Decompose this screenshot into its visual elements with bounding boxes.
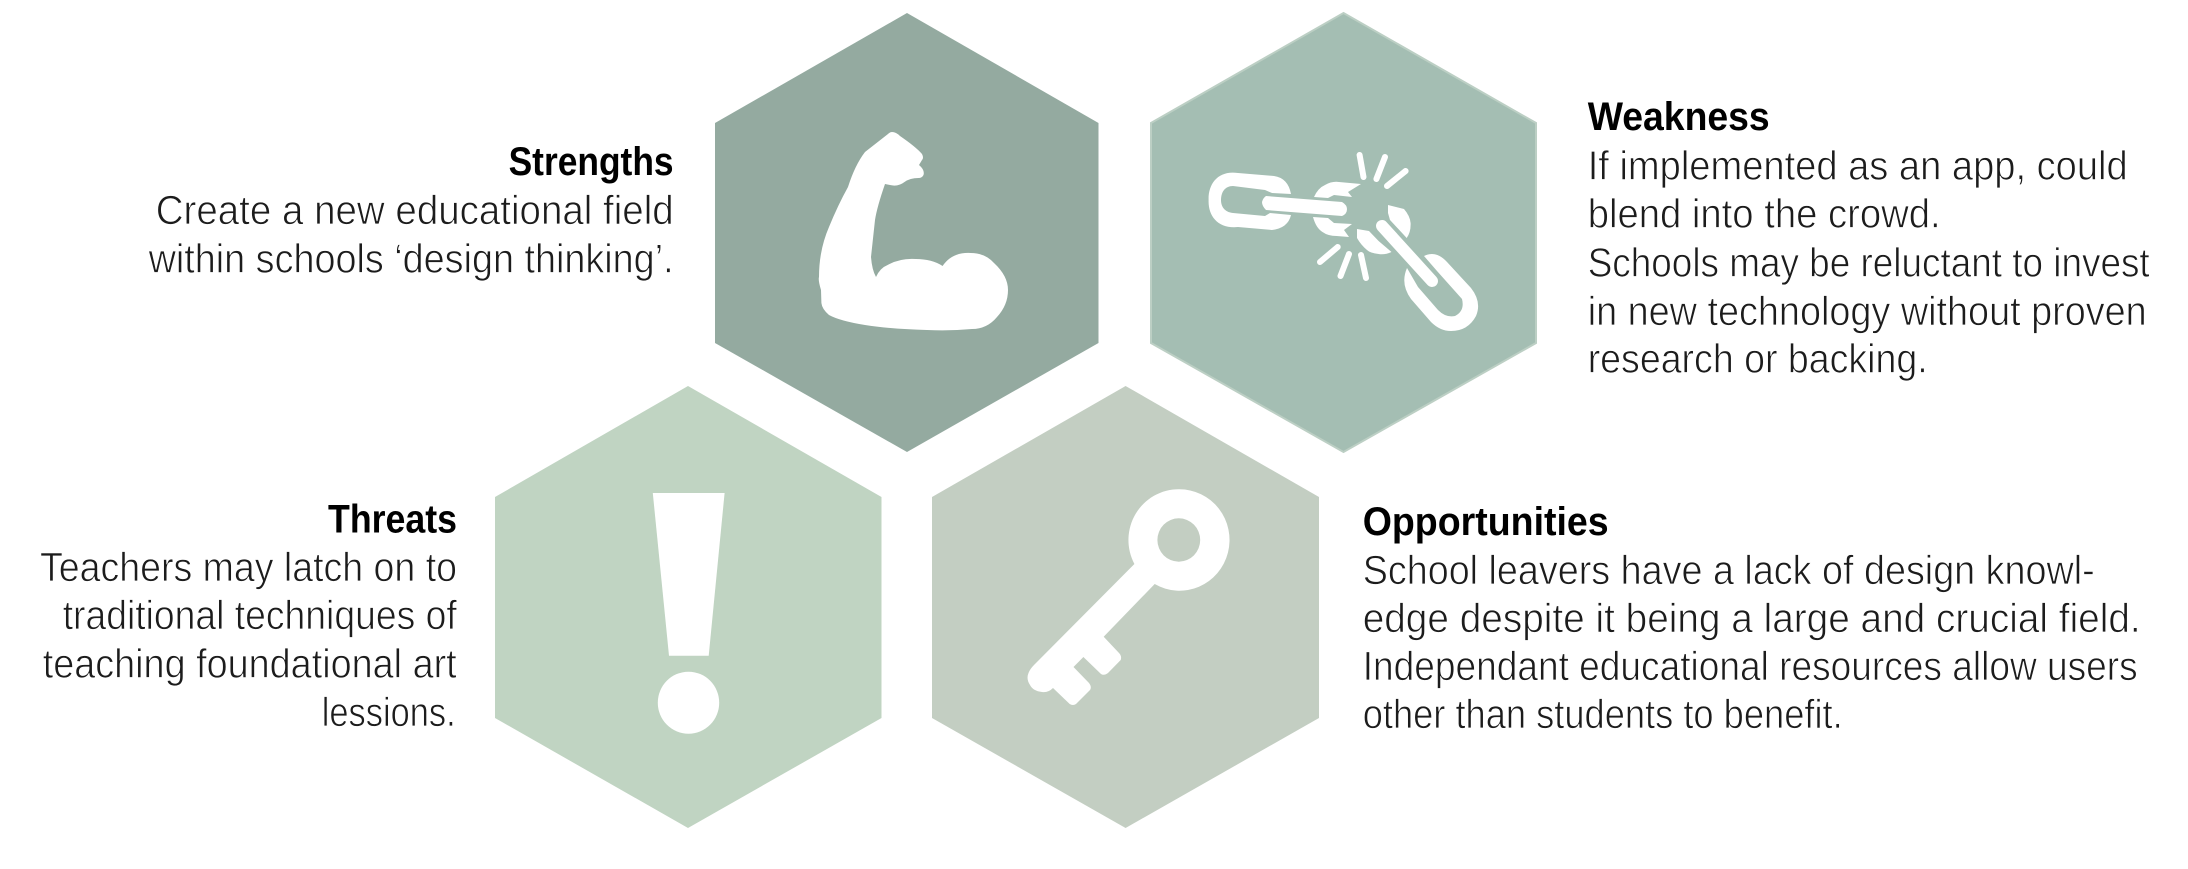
icon: flexed arm <box>819 132 1008 330</box>
heading: Weakness: Weakness <box>1588 95 1770 139</box>
text block: weakness <box>1588 95 2150 382</box>
text block: threats <box>40 498 457 735</box>
icon: exclamation mark <box>653 493 725 734</box>
panel: weakness hexagon with broken chain icon <box>1151 13 1536 452</box>
panel: strengths hexagon with arm icon <box>715 13 1098 452</box>
text block: weakness: blend into the crowd. <box>1588 191 1941 237</box>
text block: opportunities: School leavers have a lack of design knowl- <box>1363 547 2095 593</box>
icon: broken chain <box>1209 155 1478 331</box>
text block: opportunities: other than students to benefit. <box>1363 691 1843 737</box>
text block: opportunities: edge despite it being a large and crucial field. <box>1363 595 2141 641</box>
text block: strengths: Create a new educational field <box>156 187 674 233</box>
text block: threats: teaching foundational art <box>43 641 457 687</box>
text block: weakness: research or backing. <box>1588 336 1928 382</box>
heading: Strengths: Strengths <box>509 140 674 184</box>
text block: threats: lessions. <box>322 689 456 735</box>
text block: threats: Teachers may latch on to <box>40 544 457 590</box>
icon: key <box>1028 489 1230 705</box>
text block: weakness: If implemented as an app, could <box>1588 142 2128 188</box>
text block: threats: traditional techniques of <box>63 592 457 638</box>
panel: threats hexagon with exclamation icon <box>495 386 882 828</box>
text block: opportunities <box>1363 500 2141 737</box>
text block: strengths <box>148 140 674 281</box>
heading: Threats: Threats <box>328 498 457 542</box>
heading: Opportunities: Opportunities <box>1363 500 1609 544</box>
text block: strengths: within schools ‘design thinking’. <box>148 235 674 281</box>
text block: weakness: in new technology without proven <box>1588 288 2147 334</box>
panel: opportunities hexagon with key icon <box>932 386 1319 828</box>
